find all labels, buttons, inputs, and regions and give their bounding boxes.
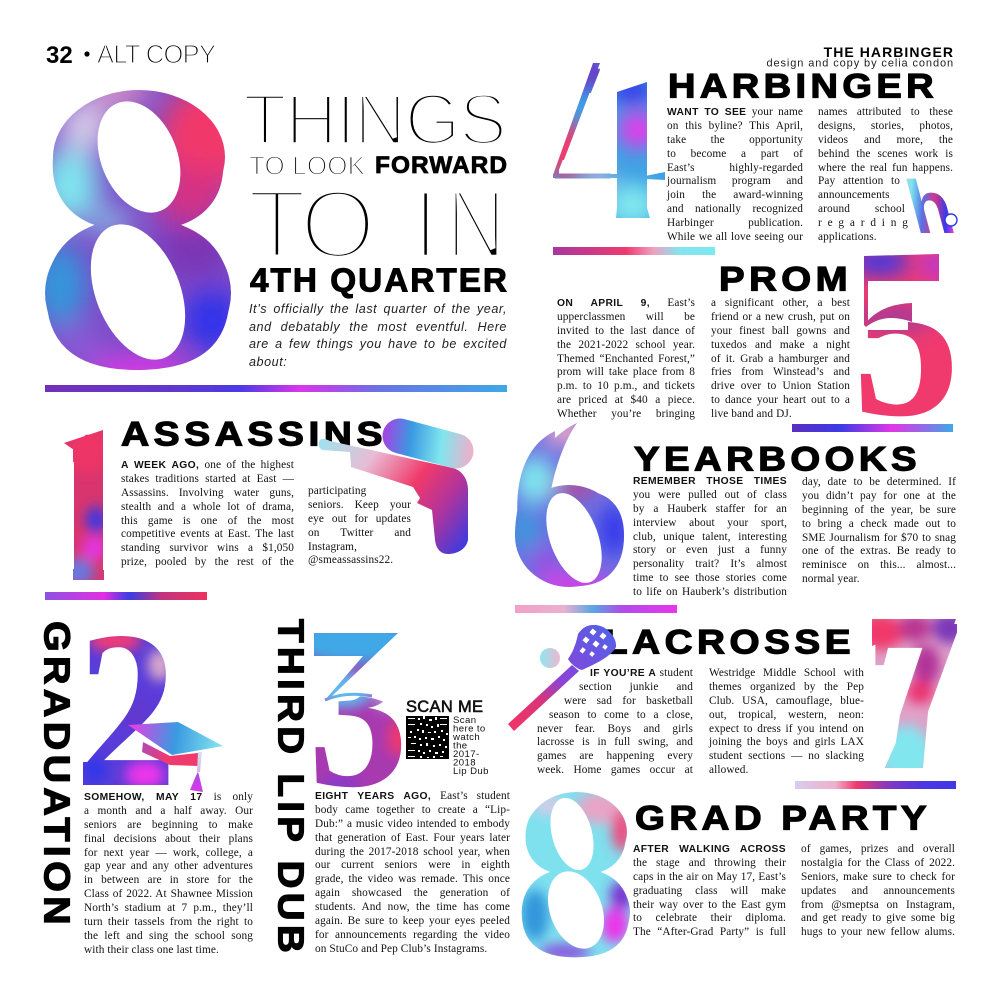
text column 1: their way over to the East gym bbox=[633, 899, 786, 911]
text column 2: videos and more, the bbox=[818, 134, 953, 146]
numeral 1 bbox=[64, 430, 104, 580]
text column 1: IF YOU’RE A student bbox=[590, 667, 693, 679]
text column 1: The “After-Grad Party” is full bbox=[633, 926, 786, 938]
text column 2: to bring a check made out to bbox=[802, 518, 956, 530]
text column 1: competitive events at East. The last bbox=[121, 528, 294, 540]
text column 1: Assassins. Involving water guns, bbox=[121, 487, 294, 499]
text column 2: out, tropical, western, neon: bbox=[709, 709, 864, 721]
text column 1: on this byline? This April, bbox=[667, 120, 803, 132]
QR caption: Scan bbox=[453, 715, 476, 726]
text column 2: applications. bbox=[818, 231, 877, 243]
header: publication credit: design and copy by celia condon bbox=[766, 58, 954, 70]
panel: 5 prom bbox=[557, 254, 952, 420]
text column 2: nostalgia for the Class of 2022. bbox=[801, 857, 955, 869]
QR code bbox=[406, 716, 449, 759]
text column 1: this game is one of the most bbox=[121, 515, 294, 527]
text column 2: your finest ball gowns and bbox=[711, 325, 850, 337]
text column 1: graduating class will make bbox=[633, 885, 786, 897]
text column 2: updates and announcements bbox=[801, 885, 955, 897]
text column 2: day, date to be determined. If bbox=[802, 476, 956, 488]
text column 2: of it. Grab a hamburger and bbox=[711, 353, 850, 365]
QR caption: 2017- bbox=[453, 749, 480, 760]
text column 1: Whether you’re bringing bbox=[557, 408, 695, 420]
text block: body came together to create a “Lip- bbox=[315, 804, 510, 816]
title: Third Lip Dub vertical: THIRD LIP DUB bbox=[271, 619, 312, 957]
text block: seniors are beginning to make bbox=[84, 819, 253, 831]
text block: with their class one last time. bbox=[84, 944, 219, 956]
title: Lacrosse: LACROSSE bbox=[604, 624, 855, 662]
text block: for announcements regarding the video bbox=[315, 929, 510, 941]
headline: THINGS: THINGS bbox=[243, 80, 507, 160]
text column 2: normal year. bbox=[802, 573, 860, 585]
intro paragraph bbox=[249, 302, 507, 369]
text column 1: were sad for basketball bbox=[564, 695, 693, 707]
text block: turn their tassels from the right to bbox=[84, 916, 253, 928]
scan me label: SCAN ME bbox=[406, 698, 483, 716]
text column 2: eye out for updates bbox=[308, 513, 411, 525]
title: Grad Party: GRAD PARTY bbox=[635, 800, 931, 838]
text block: Dub:” a music video intended to embody bbox=[315, 818, 510, 830]
numeral 8 bbox=[522, 792, 630, 958]
title: Yearbooks: YEARBOOKS bbox=[634, 440, 921, 478]
text column 2: expect to dress if you intend on bbox=[709, 723, 864, 735]
panel: 1 assassins bbox=[64, 416, 474, 580]
numeral 5 bbox=[860, 254, 952, 416]
header: publication credit bbox=[766, 44, 954, 70]
title: Prom: PROM bbox=[719, 260, 852, 298]
text column 2 bbox=[711, 297, 850, 420]
text column 1: A WEEK AGO, one of the highest bbox=[121, 459, 294, 471]
text column 1: REMEMBER THOSE TIMES bbox=[633, 476, 787, 487]
QR caption: watch bbox=[452, 732, 480, 743]
text column 2: SME Journalism for $70 to snag bbox=[802, 532, 956, 544]
text column 2: to dance your heart out to a bbox=[711, 394, 850, 406]
icon: graduation cap bbox=[128, 722, 223, 792]
text column 1: club, unique talent, interesting bbox=[633, 531, 787, 543]
panel: 8 grad party bbox=[522, 792, 955, 958]
text block: during the 2017-2018 school year, when bbox=[315, 846, 510, 858]
headline: to look forward: FORWARD bbox=[375, 152, 508, 179]
text column 1: are priced at $40 a piece. bbox=[557, 394, 695, 406]
icon: lacrosse ball bbox=[540, 648, 560, 668]
headline: 4th quarter: 4TH QUARTER bbox=[250, 262, 509, 298]
text column 1: to life on Hauberk’s distribution bbox=[633, 586, 787, 598]
text block: students. And now, the time has come bbox=[315, 901, 510, 913]
text column 1: prize, pooled by the rest of the bbox=[121, 556, 294, 568]
text column 1: personality trait? It’s almost bbox=[633, 558, 787, 570]
text column 2 bbox=[801, 843, 955, 938]
text column 2: designs, stories, photos, bbox=[818, 120, 953, 132]
text column 2: themes organized by the Pep bbox=[709, 681, 864, 693]
intro paragraph: are a few things you have to be excited bbox=[249, 337, 507, 351]
text column 1: prom will take place from 8 bbox=[557, 366, 695, 378]
text column 1: story or even just a funny bbox=[633, 544, 787, 556]
text column 1: invited to the last dance of bbox=[557, 325, 695, 337]
numeral 6 bbox=[515, 423, 624, 587]
text column 1: and nationally recognized bbox=[667, 203, 803, 215]
text block bbox=[84, 791, 253, 956]
text column 1: interview about your sport, bbox=[633, 517, 787, 529]
text column 1: take the opportunity bbox=[667, 134, 803, 146]
text column 2: Instagram, bbox=[308, 541, 357, 553]
text block: on StuCo and Pep Club’s Instagrams. bbox=[315, 943, 487, 955]
text column 2: you didn’t pay for one at the bbox=[802, 490, 956, 502]
text column 2: allowed. bbox=[709, 764, 748, 776]
text column 1: upperclassmen will be bbox=[557, 311, 695, 323]
text block: Class of 2022. At Shawnee Mission bbox=[84, 888, 253, 900]
text column 1: Harbinger publication. bbox=[667, 217, 803, 229]
text column 1: caps in the air on May 17, East’s bbox=[633, 871, 786, 883]
text column 1: to celebrate their diploma. bbox=[633, 912, 786, 924]
title: Assassins: ASSASSINS bbox=[121, 416, 387, 454]
headline: to look forward bbox=[249, 150, 508, 180]
text column 2: announcements bbox=[818, 189, 890, 201]
text column 2: on Twitter and bbox=[308, 527, 411, 539]
text column 2: beginning of the year, be sure bbox=[802, 504, 956, 516]
text column 1: you were pulled out of class bbox=[633, 489, 787, 501]
text column 1: journalism program and bbox=[667, 175, 803, 187]
text column 2 bbox=[708, 667, 864, 776]
intro paragraph: about: bbox=[249, 355, 287, 369]
icon: lacrosse stick bbox=[508, 625, 616, 731]
headline: TO IN: TO bbox=[247, 169, 376, 279]
text column 1: While we all love seeing our bbox=[667, 231, 803, 243]
headline: TO IN bbox=[247, 169, 506, 279]
text block: the left and sing the school song bbox=[84, 930, 253, 942]
text column 2: friend or a new crush, put on bbox=[711, 311, 850, 323]
text block: North’s stadium at 7 p.m., they’ll bbox=[84, 902, 253, 914]
text column 1: to become a part of bbox=[667, 148, 803, 160]
text column 2: and get ready to give some big bbox=[801, 912, 955, 924]
text column 2: student sections — no slacking bbox=[709, 750, 864, 762]
text column 2 bbox=[802, 476, 956, 585]
text column 1: games are happening every bbox=[537, 750, 693, 762]
headline: TO IN: I bbox=[412, 169, 439, 279]
text column 2: drive over to Union Station bbox=[711, 380, 850, 392]
panel: 3 third lip dub bbox=[271, 618, 510, 957]
text block: again showcased the generation of bbox=[315, 887, 510, 899]
text column 1 bbox=[537, 667, 693, 776]
text column 2: Westridge Middle School with bbox=[709, 667, 864, 679]
numeral 7 bbox=[872, 619, 957, 768]
header: publication credit: THE HARBINGER bbox=[824, 44, 954, 60]
text block: again. Be sure to keep your eyes peeled bbox=[315, 915, 510, 927]
text column 1 bbox=[557, 297, 695, 420]
title: Graduation vertical: GRADUATION bbox=[37, 621, 78, 929]
text column 2: live band and DJ. bbox=[711, 408, 792, 420]
text column 1: never fear. Boys and girls bbox=[537, 723, 693, 735]
panel: headline 8 things bbox=[45, 80, 509, 370]
text column 2: Pay attention to bbox=[818, 175, 900, 187]
QR caption: the bbox=[453, 740, 468, 752]
text column 1: WANT TO SEE your name bbox=[667, 106, 803, 118]
text column 1: ON APRIL 9, East’s bbox=[557, 297, 695, 309]
text block bbox=[315, 790, 510, 955]
headline: TO IN: N bbox=[446, 169, 506, 279]
QR caption: 2018 bbox=[453, 758, 476, 768]
numeral 3 bbox=[314, 633, 402, 788]
text column 2: a significant other, a best bbox=[711, 297, 850, 309]
text column 2: seniors. Keep your bbox=[308, 499, 411, 511]
text column 2: where the real fun happens. bbox=[818, 162, 953, 174]
text column 2: reminisce on this... almost... bbox=[802, 559, 956, 571]
text column 2: participating bbox=[308, 485, 366, 497]
icon: water gun bbox=[319, 436, 468, 554]
text column 2 bbox=[818, 106, 953, 243]
icon: h logo: h bbox=[898, 166, 963, 249]
text block: EIGHT YEARS AGO, East’s student bbox=[315, 790, 510, 802]
text column 2: joining the boys and girls LAX bbox=[709, 736, 864, 748]
text block: in between are in store for the bbox=[84, 874, 253, 886]
text column 1: Themed “Enchanted Forest,” bbox=[557, 353, 695, 365]
text column 1: season to come to a close, bbox=[549, 709, 693, 721]
text block: for next year — work, college, a bbox=[84, 847, 253, 859]
text column 1: stealth and a whole lot of drama, bbox=[121, 501, 294, 513]
text column 1: standing survivor wins a $1,050 bbox=[121, 542, 294, 554]
text column 2: from @smeptsa on Instagram, bbox=[801, 899, 955, 911]
panel: 7 lacrosse bbox=[508, 619, 957, 776]
text column 2: Club. USA, camouflage, blue- bbox=[709, 695, 864, 707]
text column 2: one of the extras. Be ready to bbox=[802, 545, 956, 557]
page header: folio: ALT COPY bbox=[97, 41, 216, 69]
title: Harbinger: HARBINGER bbox=[668, 68, 938, 106]
text column 1 bbox=[633, 476, 787, 598]
text column 1: the stage and throwing their bbox=[633, 857, 786, 869]
text column 2: tuxedos and make a night bbox=[711, 339, 850, 351]
text column 1 bbox=[666, 106, 803, 243]
text column 1: week. Home games occur at bbox=[537, 764, 693, 776]
QR caption: here to bbox=[453, 724, 486, 734]
panel: 2 graduation bbox=[37, 621, 253, 956]
headline: to look forward: TO LOOK bbox=[249, 150, 366, 180]
text block: SOMEHOW, MAY 17 is only bbox=[84, 791, 253, 803]
text column 1 bbox=[633, 844, 786, 938]
text column 1: p.m. to 10 p.m., and tickets bbox=[557, 380, 695, 392]
text column 2: of games, prizes and overall bbox=[801, 843, 955, 855]
intro paragraph: and debatably the most eventful. Here bbox=[249, 320, 507, 334]
QR caption: Lip Dub bbox=[453, 766, 489, 777]
text column 1: section junkie and bbox=[579, 681, 693, 693]
big numeral 8 bbox=[45, 90, 231, 370]
text column 1: lacrosse is in full swing, and bbox=[537, 736, 693, 748]
panel: 4 harbinger bbox=[553, 63, 963, 249]
text column 2: names attributed to these bbox=[818, 106, 953, 118]
text block: grade, the video was remade. This once bbox=[315, 873, 510, 885]
intro paragraph: It’s officially the last quarter of the year, bbox=[249, 302, 507, 316]
numeral 2 bbox=[83, 636, 168, 785]
text column 1: time to see those stories come bbox=[633, 572, 787, 584]
panel: 6 yearbooks bbox=[515, 423, 956, 598]
text column 2: r e g a r d i n g bbox=[818, 217, 908, 229]
text column 2: Seniors, make sure to check for bbox=[801, 871, 955, 883]
text column 2: around school bbox=[818, 203, 905, 215]
text column 2: fries from Winstead’s and bbox=[711, 366, 850, 378]
text block: a month and a half away. Our bbox=[84, 805, 253, 817]
text column 2: behind the scenes work is bbox=[818, 148, 953, 160]
page header: folio: 32 bbox=[46, 42, 73, 69]
text column 1: the 2021-2022 school year. bbox=[557, 339, 695, 351]
text column 1: stakes traditions started at East — bbox=[121, 473, 294, 485]
text block: final decisions about their plans bbox=[84, 833, 253, 845]
text column 1: AFTER WALKING ACROSS bbox=[633, 844, 786, 855]
text column 1 bbox=[121, 459, 294, 568]
text column 1: East’s highly-regarded bbox=[667, 162, 803, 174]
numeral 4 bbox=[553, 63, 665, 218]
text block: our current seniors were in eighth bbox=[315, 859, 510, 871]
text column 1: by a Hauberk staffer for an bbox=[633, 503, 787, 515]
text column 2 bbox=[308, 485, 411, 566]
text column 1: join the award-winning bbox=[667, 189, 803, 201]
text block: that generation of East. Four years later bbox=[315, 832, 510, 844]
text column 2: hugs to your new fellow alums. bbox=[801, 926, 955, 938]
text block: gap year and any other adventures bbox=[84, 860, 253, 872]
text column 2: @smeassassins22. bbox=[308, 554, 393, 566]
